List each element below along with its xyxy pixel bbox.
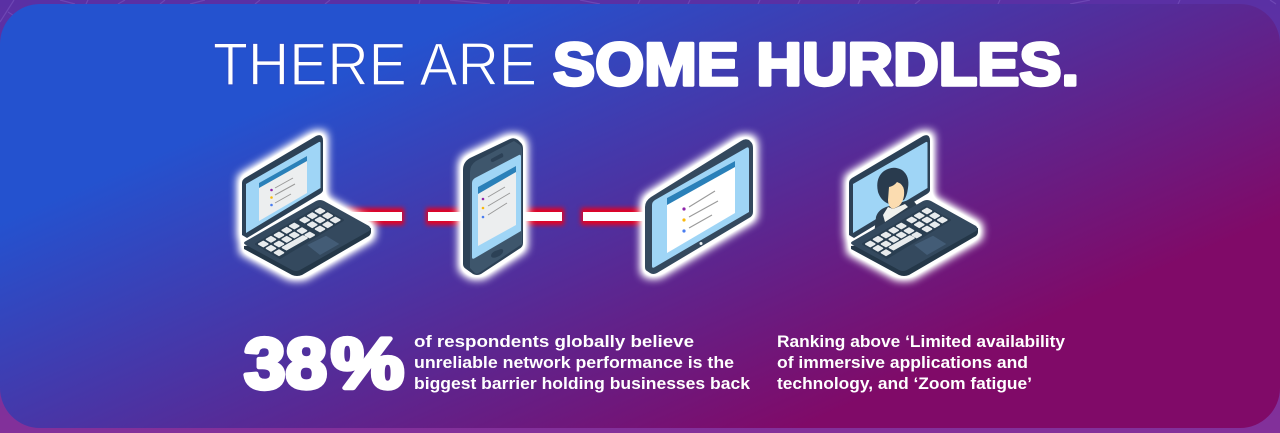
title: THERE ARE xyxy=(213,31,537,98)
text block: respondents: unreliable network performance is the xyxy=(414,354,734,372)
text block: ranking: of immersive applications and xyxy=(777,354,1028,372)
text block: respondents: biggest barrier holding businesses back xyxy=(414,375,751,393)
text block: ranking: technology, and ‘Zoom fatigue’ xyxy=(777,375,1032,393)
icon: laptop with video call person xyxy=(849,135,978,276)
icon: smartphone with app window xyxy=(463,138,523,275)
title: SOME HURDLES. xyxy=(553,31,1079,98)
statistic: 38%: 38 xyxy=(244,325,327,404)
statistic: 38%: % xyxy=(331,325,404,404)
title xyxy=(213,31,1079,98)
icon: laptop with app window xyxy=(242,135,371,276)
statistic: 38% xyxy=(244,325,404,404)
broken network connection bars xyxy=(345,208,649,225)
icon: tablet with app window xyxy=(645,139,753,274)
text block: respondents: of respondents globally believe xyxy=(414,333,694,351)
text block: respondents xyxy=(414,333,751,393)
text block: ranking: Ranking above ‘Limited availability xyxy=(777,333,1066,351)
text block: ranking xyxy=(777,333,1066,393)
